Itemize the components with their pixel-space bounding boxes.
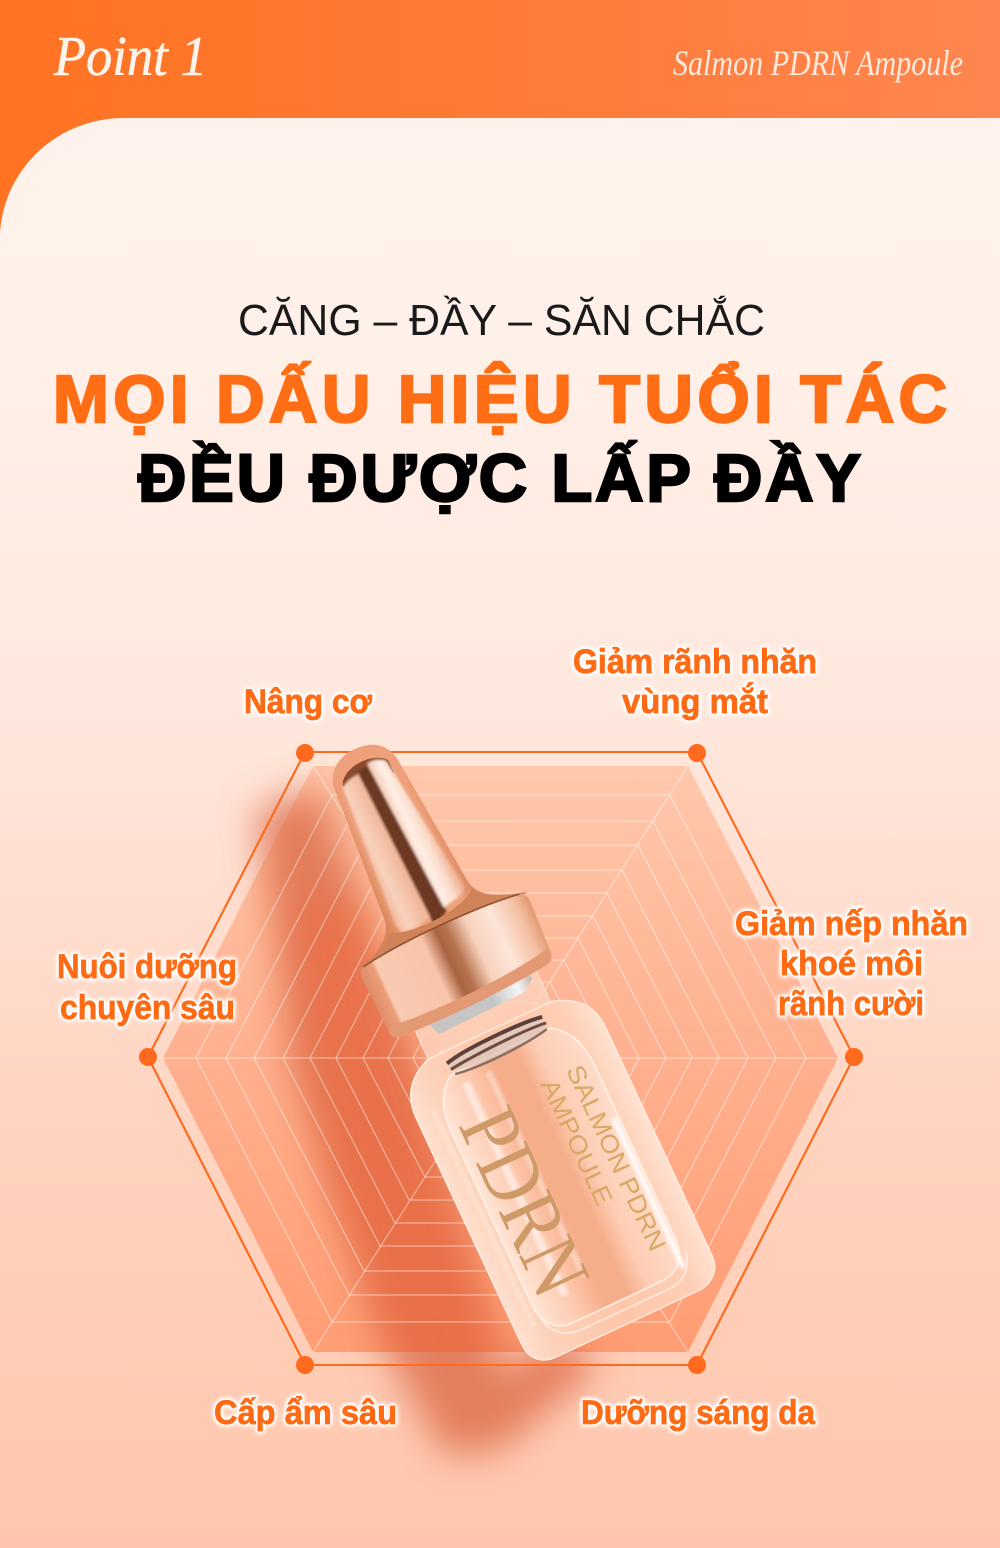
radar vertex dots (139, 744, 863, 1374)
glass neck (413, 969, 557, 1072)
collar lower lip (385, 948, 557, 1042)
heading (53, 295, 947, 516)
benefit label: Dưỡng sáng da: Dưỡng sáng da (581, 1394, 816, 1432)
header: Point 1: Point 1 (53, 26, 207, 88)
glass rim (445, 1013, 552, 1078)
dropper seal (426, 972, 537, 1037)
dropper bulb (271, 708, 528, 972)
shadow deepening inside hexagon (292, 894, 506, 1352)
label: AMPOULE: AMPOULE (535, 1075, 618, 1210)
benefit label: Nâng cơ: Nâng cơ (244, 683, 373, 721)
benefit label: Giảm nếp nhăn khoé môi rãnh cười: rãnh cười (778, 985, 924, 1023)
black headline: ĐỀU ĐƯỢC LẤP ĐẦY (138, 441, 861, 516)
centre dark bar (357, 761, 450, 928)
bulb dark top (337, 751, 394, 795)
bulb reflection bars (328, 748, 474, 941)
benefit label: Giảm nếp nhăn khoé môi rãnh cười: Giảm nếp nhăn (735, 905, 968, 943)
benefit label: Nuôi dưỡng chuyên sâu (57, 948, 237, 1027)
benefit label: Cấp ẩm sâu: Cấp ẩm sâu (214, 1394, 397, 1432)
radar hexagon chart (148, 752, 854, 1365)
benefit label: Nuôi dưỡng chuyên sâu: Nuôi dưỡng (57, 948, 237, 986)
collar edge shade (361, 889, 519, 967)
benefit label: Giảm rãnh nhăn vùng mắt: vùng mắt (622, 683, 768, 721)
bottle cast shadow (255, 785, 600, 1456)
benefit label: Nuôi dưỡng chuyên sâu: chuyên sâu (60, 989, 235, 1027)
liquid capsule (429, 1018, 689, 1335)
inner filled hexagon (163, 766, 838, 1352)
benefit label: Giảm nếp nhăn khoé môi rãnh cười: khoé môi (780, 945, 923, 983)
dropper collar (356, 887, 560, 1043)
radar outline over shadow (148, 752, 854, 1365)
outer hexagon outline (148, 752, 854, 1365)
glass body (396, 986, 723, 1368)
benefit label: Giảm rãnh nhăn vùng mắt: Giảm rãnh nhăn (573, 643, 817, 681)
subtitle line: CĂNG – ĐẦY – SĂN CHẮC (238, 295, 765, 345)
header band with rounded corner (0, 0, 1000, 236)
orange headline: MỌI DẤU HIỆU TUỔI TÁC (53, 362, 947, 437)
flare shading (347, 868, 527, 970)
label: SALMON PDRN: SALMON PDRN (560, 1061, 671, 1256)
capsule base double line (540, 1250, 697, 1343)
highlights (427, 1031, 686, 1336)
left peach bar (331, 772, 433, 937)
concentric radar grid (163, 766, 838, 1352)
benefit label: Giảm rãnh nhăn vùng mắt (573, 643, 817, 721)
right highlight bar (366, 748, 468, 911)
product: ampoule bottle (264, 703, 723, 1368)
benefit label: Giảm nếp nhăn khoé môi rãnh cười (735, 905, 968, 1023)
label: PDRN: PDRN (441, 1093, 608, 1310)
